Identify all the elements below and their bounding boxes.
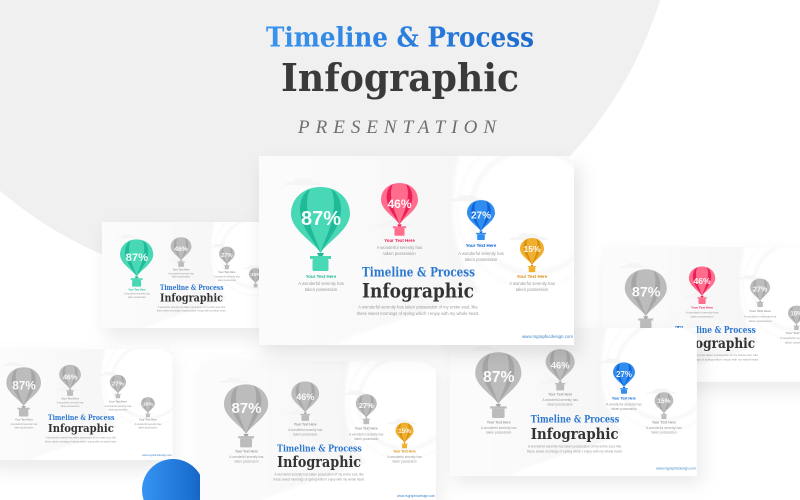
balloon 46%: A wonderful serenity has — [686, 310, 719, 314]
balloon 46%: 46% — [694, 276, 711, 286]
panel: bottom-left slide shadow — [0, 358, 173, 470]
balloon 87%: A wonderful serenity has — [298, 281, 344, 286]
balloon 15% — [135, 397, 162, 429]
balloon 46%: 46% — [63, 375, 78, 382]
balloon 27% — [105, 375, 132, 412]
panel: bottom-right slide, blue balloon highlighted — [456, 328, 697, 476]
balloon 87%: A wonderful serenity has — [124, 293, 151, 296]
balloon 87% — [224, 384, 268, 463]
balloon 15%: Your Text Here — [393, 450, 416, 454]
balloon 87%: A wonderful serenity has — [11, 423, 38, 426]
balloon 27%: 27% — [753, 286, 768, 294]
balloon 46%: taken possession — [691, 315, 714, 319]
balloon 27%: A wonderful serenity has — [606, 403, 642, 407]
balloon 15%: A wonderful serenity has — [135, 423, 162, 426]
balloon 87%: Your Text Here — [235, 450, 258, 454]
slide heading: A wonderful serenity has taken possession of my entire soul, like — [528, 444, 622, 448]
balloon 46%: 46% — [551, 360, 570, 371]
balloon 15% — [509, 238, 555, 292]
balloon 15%: Your Text Here — [517, 274, 548, 279]
balloon 27%: Your Text Here — [355, 426, 378, 430]
slide heading: Timeline & Process — [362, 266, 475, 280]
balloon 87% — [120, 239, 153, 299]
balloon 46%: 46% — [296, 392, 314, 402]
balloon 46%: taken possession — [383, 251, 416, 256]
balloon 27%: A wonderful serenity has — [105, 405, 132, 408]
panel: right slide, red balloon highlighted — [609, 254, 800, 382]
slide heading — [672, 325, 759, 361]
balloon 87%: Your Text Here — [128, 289, 146, 292]
slide heading: these sweet mornings of spring which I enjoy with my whole heart. — [357, 311, 479, 316]
balloon 46%: taken possession — [548, 403, 573, 407]
panel: main slide shadow — [263, 166, 579, 354]
watermark: www.rsgraphicdesign.com — [656, 467, 696, 471]
panel: left slide, teal balloon highlighted — [102, 222, 261, 328]
balloon 46%: Your Text Here — [294, 423, 317, 427]
balloon 87%: A wonderful serenity has — [229, 455, 264, 459]
balloon 87%: 87% — [632, 284, 661, 300]
slide heading: Infographic — [531, 425, 619, 443]
balloon 46% — [57, 365, 84, 408]
balloon 27%: Your Text Here — [749, 309, 771, 313]
slide heading — [157, 283, 226, 312]
balloon 87%: taken possession — [128, 296, 147, 299]
panel: bottom-right slide shadow — [454, 336, 702, 484]
balloon 27%: 27% — [616, 370, 632, 379]
balloon 46%: A wonderful serenity has — [57, 402, 84, 405]
balloon 87%: 87% — [126, 252, 148, 264]
balloon 27%: 27% — [471, 210, 491, 222]
balloon 15%: A wonderful serenity has — [388, 455, 422, 459]
slide heading: Infographic — [362, 280, 474, 302]
balloon 46% — [542, 349, 578, 407]
balloon 46%: A wonderful serenity has — [542, 398, 578, 402]
balloon 27%: taken possession — [218, 279, 237, 282]
balloon 27% — [744, 279, 777, 323]
watermark: www.rsgraphicdesign.com — [142, 453, 172, 457]
balloon 15%: taken possession — [138, 426, 158, 429]
balloon 27%: 27% — [359, 401, 374, 410]
balloon 15%: A wonderful serenity has — [646, 426, 682, 430]
balloon 46% — [377, 183, 422, 256]
balloon 87%: Your Text Here — [15, 418, 33, 422]
balloon 15% — [388, 423, 422, 463]
slide heading: A wonderful serenity has taken possession of my entire soul, like — [358, 304, 478, 310]
balloon 27% — [349, 394, 384, 441]
subheading: Presentation: PRESENTATION — [297, 117, 497, 138]
slide heading: Infographic — [277, 454, 361, 471]
balloon 27%: taken possession — [749, 319, 772, 323]
balloon 15%: 15% — [251, 272, 261, 278]
balloon 87%: Your Text Here — [487, 421, 511, 425]
balloon 27%: Your Text Here — [218, 271, 236, 274]
balloon 46%: A wonderful serenity has — [377, 245, 422, 250]
slide heading — [273, 443, 365, 481]
balloon 87%: Your Text Here — [306, 274, 337, 279]
balloon 87%: 87% — [231, 400, 261, 417]
balloon 46%: A wonderful serenity has — [288, 428, 323, 432]
balloon 27%: 27% — [112, 382, 125, 388]
balloon 87%: 87% — [12, 380, 36, 393]
balloon 15%: A wonderful serenity has — [509, 281, 555, 286]
panel: bottom-left slide, all grey — [0, 356, 172, 460]
slide heading — [357, 266, 479, 316]
balloon 27%: A wonderful serenity has — [349, 432, 384, 436]
slide heading: A wonderful serenity has taken possession of my entire soul, like — [46, 437, 117, 440]
balloon 27%: 27% — [221, 253, 233, 259]
panel: main slide, all balloons coloured — [259, 156, 574, 345]
heading: Timeline & Process: Timeline & Process — [266, 22, 534, 54]
balloon 87% — [6, 367, 41, 429]
slide heading: A wonderful serenity has taken possession of my entire soul, like — [274, 472, 364, 476]
slide heading: Timeline & Process — [160, 283, 224, 292]
balloon 46%: Your Text Here — [384, 238, 415, 243]
slide heading: Timeline & Process — [48, 413, 114, 422]
balloon 15% — [249, 268, 262, 287]
balloon 46%: 46% — [174, 246, 188, 253]
balloon 27% — [606, 363, 642, 411]
slide heading: Timeline & Process — [675, 325, 756, 336]
panel: bottom-middle slide, orange balloon highlighted — [200, 368, 436, 500]
balloon 15%: 15% — [657, 398, 671, 405]
title — [266, 22, 534, 138]
balloon 46%: Your Text Here — [691, 305, 713, 309]
balloon 27%: A wonderful serenity has — [458, 251, 504, 256]
balloon 27% — [458, 200, 504, 262]
balloon 46%: Your Text Here — [61, 397, 80, 401]
balloon 46%: A wonderful serenity has — [168, 272, 195, 275]
balloon 15%: 15% — [143, 401, 153, 407]
balloon 27%: taken possession — [465, 257, 498, 262]
balloon 27%: A wonderful serenity has — [214, 276, 241, 279]
balloon 27%: Your Text Here — [109, 399, 127, 403]
balloon 87%: taken possession — [486, 431, 512, 435]
balloon 27%: taken possession — [611, 407, 637, 411]
balloon 46%: Your Text Here — [548, 392, 572, 396]
balloon 15%: taken possession — [392, 459, 417, 463]
balloon 46% — [686, 266, 719, 319]
balloon 46% — [288, 381, 323, 436]
slide heading — [527, 414, 623, 454]
watermark: www.rsgraphicdesign.com — [522, 334, 573, 339]
balloon 87% — [625, 269, 667, 344]
balloon 15%: Your Text Here — [139, 418, 157, 422]
balloon 27%: Your Text Here — [466, 243, 497, 248]
balloon 15%: taken possession — [651, 431, 677, 435]
slide heading: A wonderful serenity has taken possession of my entire soul, like — [673, 353, 758, 357]
panel: bottom-middle slide shadow — [204, 368, 440, 500]
balloon 46%: taken possession — [293, 432, 318, 436]
balloon 15%: taken possession — [516, 287, 549, 292]
balloon 15%: Your Text Here — [652, 421, 676, 425]
balloon 87% — [475, 352, 521, 435]
balloon 27%: Your Text Here — [612, 396, 636, 400]
balloon 87%: taken possession — [635, 340, 658, 344]
balloon 15% — [780, 306, 800, 344]
slide heading: these sweet mornings of spring which I enjoy with my whole heart. — [157, 309, 226, 312]
slide heading: Timeline & Process — [531, 414, 620, 425]
balloon 87%: 87% — [483, 369, 514, 386]
balloon 46%: Your Text Here — [172, 268, 190, 271]
balloon 87%: A wonderful serenity has — [630, 336, 663, 340]
panel: right slide shadow — [606, 256, 800, 390]
balloon 15%: 15% — [398, 428, 411, 435]
slide heading — [45, 413, 117, 443]
balloon 87%: Your Text Here — [635, 331, 657, 335]
balloon 15%: 15% — [523, 244, 541, 254]
balloon 27%: taken possession — [108, 409, 128, 412]
balloon 46%: taken possession — [172, 276, 191, 279]
balloon 87% — [291, 187, 350, 292]
balloon 87%: taken possession — [305, 287, 338, 292]
balloon 87%: taken possession — [234, 459, 259, 463]
slide heading: these sweet mornings of spring which I enjoy with my whole heart. — [273, 477, 365, 481]
slide heading: A wonderful serenity has taken possession of my entire soul, like — [158, 306, 226, 309]
slide heading: Infographic — [160, 292, 223, 305]
balloon 27% — [214, 247, 241, 282]
decorative blue circle — [142, 459, 204, 500]
panel: left slide shadow — [106, 230, 266, 338]
slide heading: these sweet mornings of spring which I enjoy with my whole heart. — [527, 450, 623, 454]
heading: Infographic: Infographic — [281, 56, 519, 101]
slide heading: Infographic — [48, 421, 114, 435]
balloon 87%: 87% — [301, 208, 341, 230]
slide heading: Infographic — [675, 336, 755, 352]
slide heading: Timeline & Process — [277, 443, 362, 454]
watermark: www.rsgraphicdesign.com — [397, 494, 436, 498]
slide heading: these sweet mornings of spring which I enjoy with my whole heart. — [45, 440, 117, 443]
slide heading: these sweet mornings of spring which I enjoy with my whole heart. — [672, 357, 759, 361]
balloon 27%: A wonderful serenity has — [744, 315, 777, 319]
balloon 87%: taken possession — [14, 426, 34, 429]
balloon 46% — [168, 237, 195, 279]
balloon 46%: taken possession — [61, 405, 80, 408]
balloon 46%: 46% — [387, 197, 412, 211]
balloon 15% — [646, 392, 682, 435]
balloon 87%: A wonderful serenity has — [481, 426, 517, 430]
balloon 27%: taken possession — [354, 437, 379, 441]
